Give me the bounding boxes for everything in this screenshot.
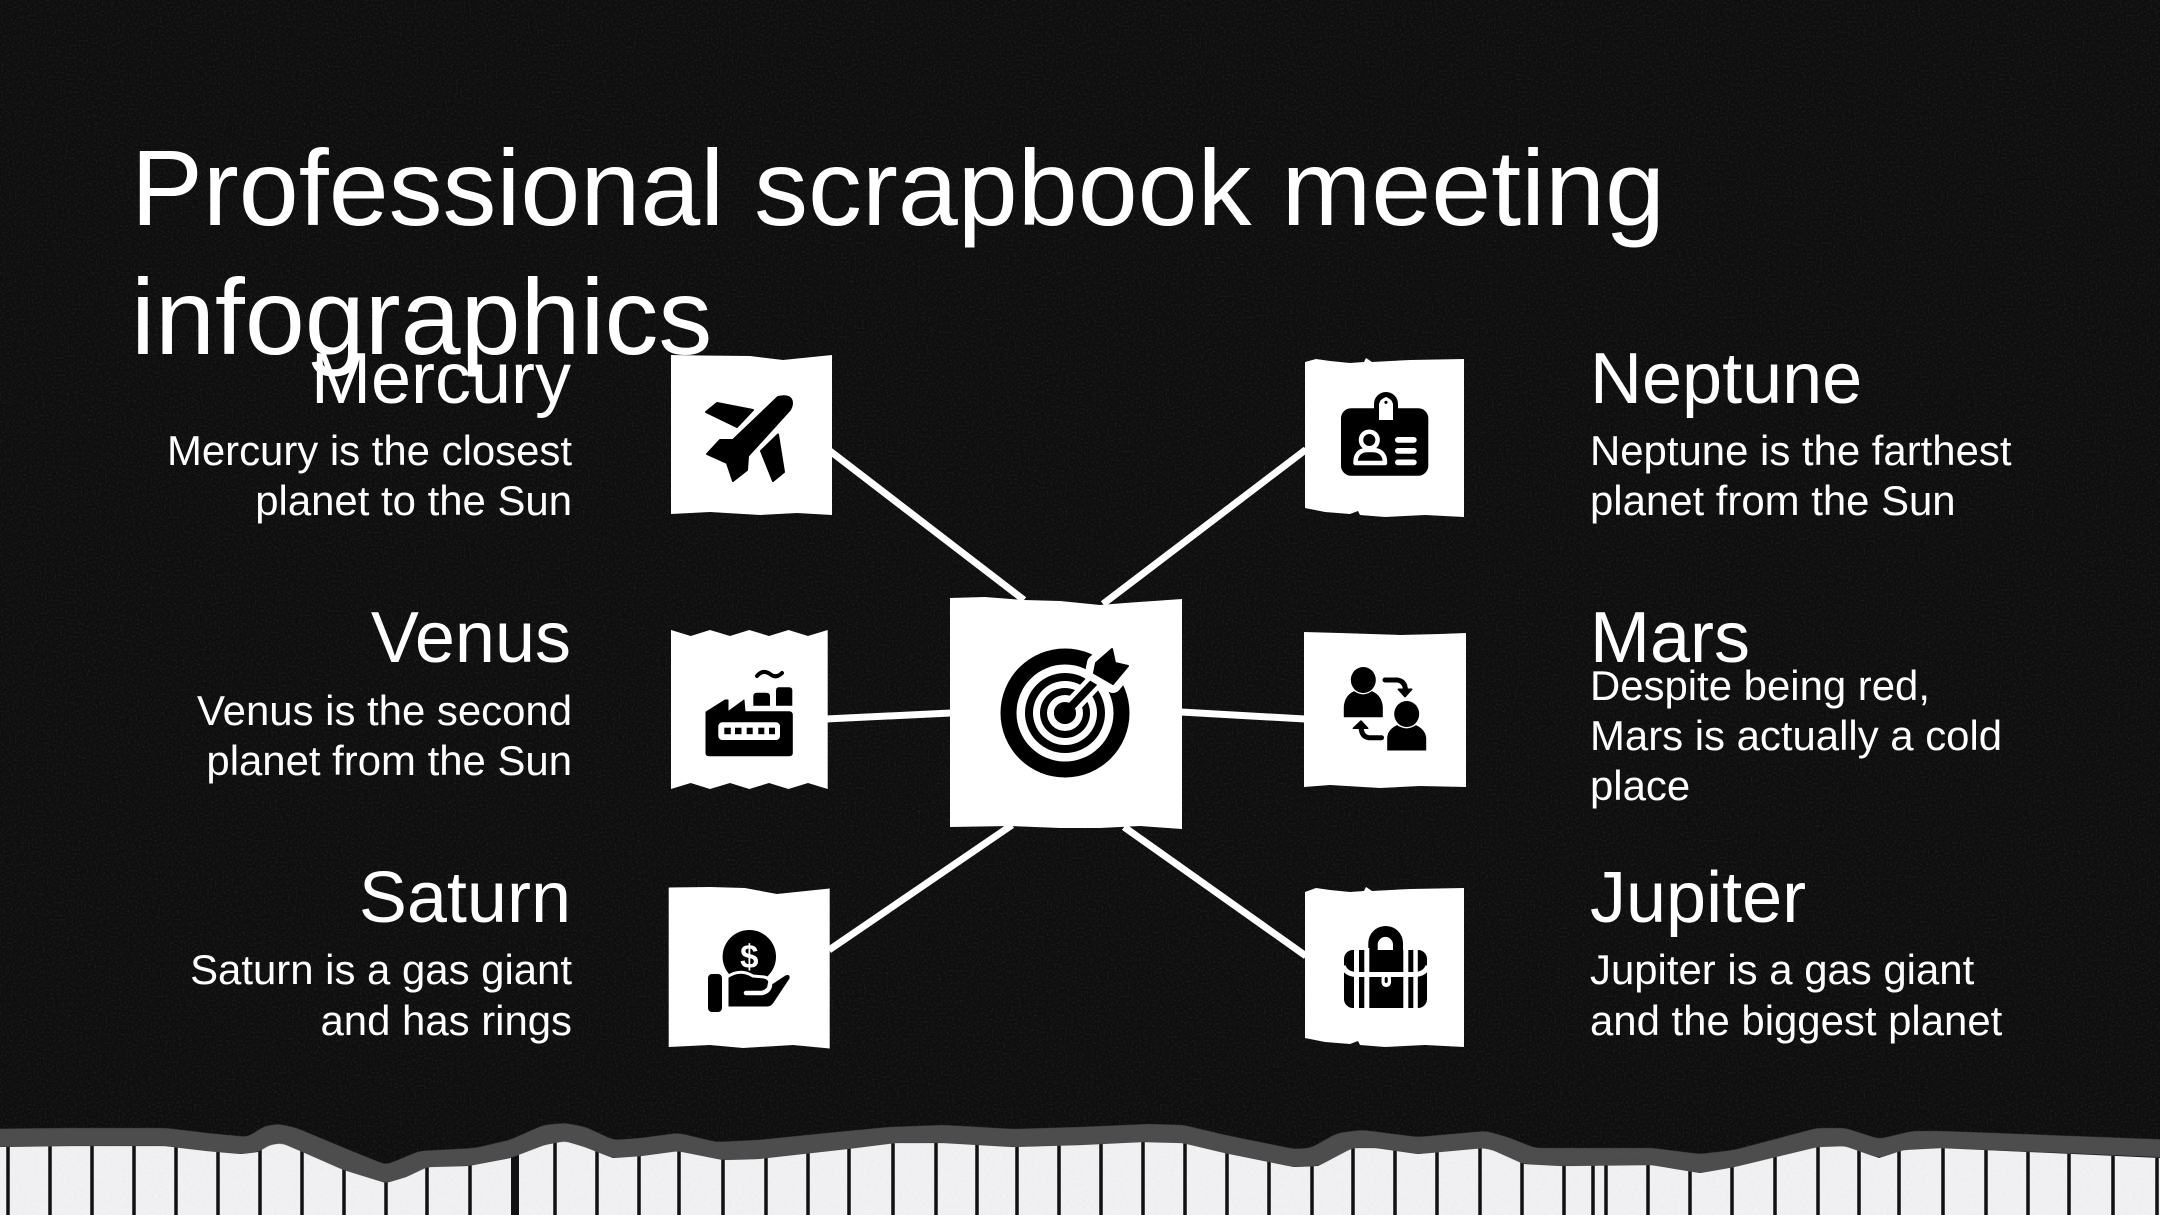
panel: Mercury text (167, 339, 572, 524)
paper with vertical black lines (0, 1142, 2160, 1215)
connector lines from centre to each icon (826, 450, 1306, 956)
panel: Saturn text: and has rings (320, 997, 572, 1044)
panel: Neptune text: Neptune is the farthest (1590, 427, 2012, 474)
icon: Mercury airplane (671, 355, 832, 515)
title: Professional scrapbook meeting (131, 127, 1665, 248)
panel: Neptune text: Neptune (1590, 339, 1862, 419)
panel: Jupiter text: Jupiter is a gas giant (1590, 946, 1975, 993)
icon: Mars people exchange (1304, 632, 1466, 788)
icon: centre target with arrow (950, 597, 1182, 829)
panel: Mars text: place (1590, 762, 1690, 809)
panel: Saturn text: Saturn is a gas giant (190, 946, 572, 993)
panel: Mars text: Mars (1590, 598, 1750, 678)
panel: Jupiter text: Jupiter (1590, 858, 1806, 938)
panel: Jupiter text: and the biggest planet (1590, 997, 2003, 1044)
panel: Neptune text: planet from the Sun (1590, 477, 1956, 524)
panel: Mars text (1590, 598, 2002, 809)
panel: Mars text: Mars is actually a cold (1590, 712, 2002, 759)
panel: Mercury text: planet to the Sun (255, 477, 572, 524)
panel: Mercury text: Mercury (311, 339, 571, 419)
icon: Saturn hand holding coin (669, 887, 830, 1048)
panel: Venus text: planet from the Sun (206, 737, 572, 784)
icon: Jupiter briefcase (1305, 887, 1464, 1047)
grey torn edge band (0, 1125, 2160, 1181)
panel: Venus text: Venus (371, 598, 571, 678)
torn striped paper strip along the bottom (0, 1120, 2160, 1215)
panel: Neptune text (1590, 339, 2012, 524)
panel: Venus text: Venus is the second (197, 687, 572, 734)
dollar sign: $ (740, 938, 758, 975)
title: infographics (131, 256, 712, 377)
icon: Venus factory (671, 630, 828, 789)
panel: Saturn text: Saturn (359, 858, 571, 938)
panel: Jupiter text (1590, 858, 2003, 1044)
panel: Venus text (197, 598, 572, 784)
title (131, 127, 1665, 377)
panel: Saturn text (190, 858, 572, 1044)
panel: Mercury text: Mercury is the closest (167, 427, 572, 474)
panel: Mars text: Despite being red, (1590, 662, 1930, 709)
icon: Neptune ID badge (1305, 358, 1464, 517)
